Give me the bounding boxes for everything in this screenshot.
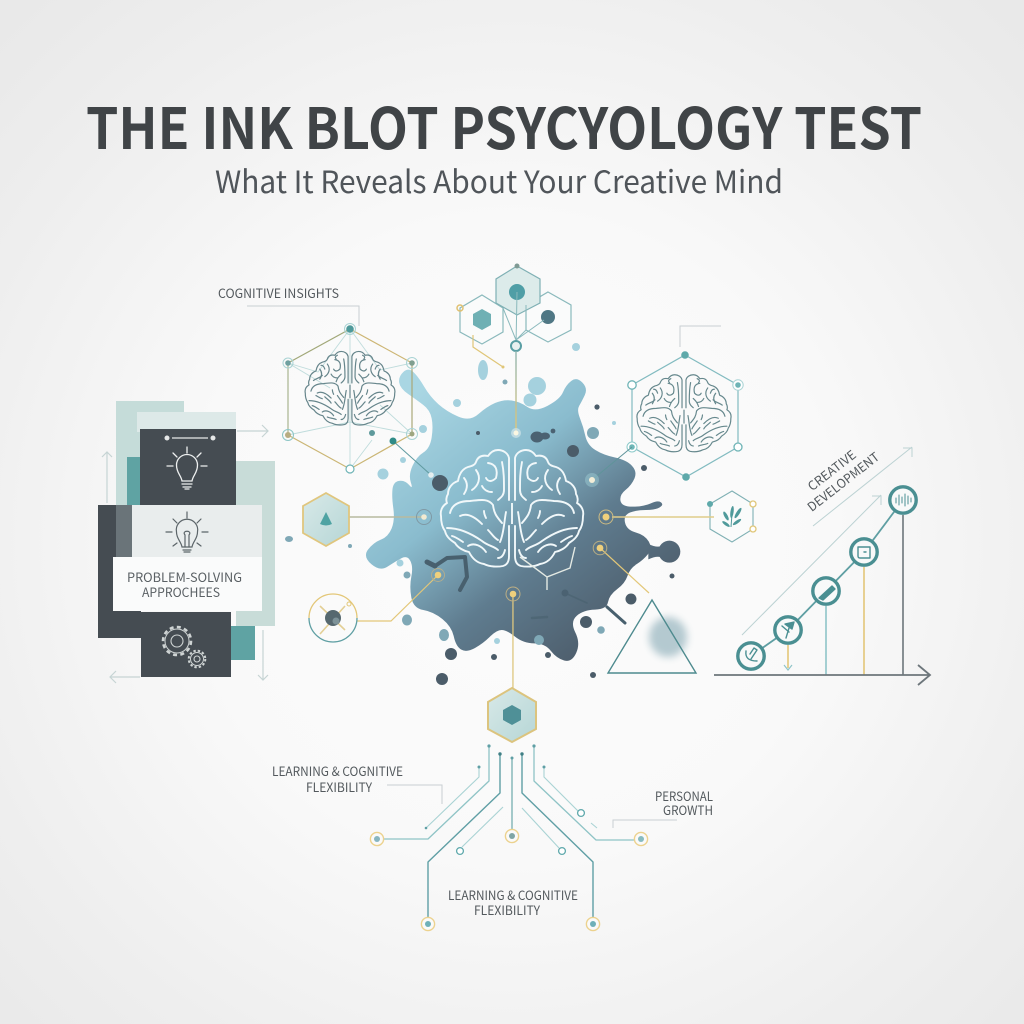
label: learning and cognitive flexibility bottom: FLEXIBILITY	[474, 900, 540, 919]
label: problem-solving approaches: APPROCHEES	[142, 582, 220, 601]
label: learning and cognitive flexibility left	[272, 761, 442, 804]
arrows around panel	[102, 425, 268, 683]
circuit ring nodes	[457, 810, 584, 854]
milestone icons	[746, 494, 911, 661]
triangle with blur	[593, 541, 696, 673]
right hexagon with leaf icon	[599, 491, 756, 542]
label: learning and cognitive flexibility left: LEARNING & COGNITIVE	[272, 761, 403, 780]
label: personal growth: GROWTH	[663, 800, 713, 819]
label: problem-solving approaches: PROBLEM-SOLVING	[127, 567, 242, 586]
hexagon nodes	[627, 351, 743, 481]
icon: light bulb on dark card	[167, 447, 207, 489]
label: personal growth: PERSONAL	[655, 786, 713, 805]
circuit gold nodes	[370, 829, 648, 931]
label: problem-solving approaches	[127, 567, 242, 601]
brain line art	[305, 351, 395, 425]
connector to ink blot	[393, 441, 431, 475]
trend arrows	[742, 447, 912, 635]
bottom hexagon with connector	[488, 587, 536, 742]
icon: leaf sprig	[721, 506, 743, 528]
label: creative development: DEVELOPMENT	[803, 446, 883, 515]
circuit end dots	[425, 744, 546, 829]
subtitle: What It Reveals About Your Creative Mind	[215, 157, 783, 202]
ink blot	[366, 370, 680, 661]
circuit lines	[370, 744, 648, 931]
label: cognitive insights	[218, 283, 359, 326]
icon: gears	[163, 627, 205, 667]
axis	[714, 665, 930, 685]
stem lines	[788, 515, 903, 675]
label: personal growth	[613, 786, 713, 828]
chart: creative development	[714, 434, 930, 685]
label: creative development: CREATIVE	[803, 445, 860, 495]
panel: cognitive insights hexagon with brain	[282, 324, 434, 478]
panel: top hexagon cluster	[457, 264, 571, 438]
dark ink splatters	[427, 429, 625, 623]
brain stem branch	[520, 547, 575, 590]
label: learning and cognitive flexibility bottom	[448, 885, 578, 919]
hexagon nodes	[282, 324, 418, 473]
central brain	[441, 450, 583, 567]
brain line art	[637, 375, 731, 452]
icon: light bulb on light card	[166, 512, 208, 552]
circle node with gold connector	[309, 568, 444, 642]
panel: problem-solving approaches	[98, 401, 275, 683]
label: cognitive insights: COGNITIVE INSIGHTS	[218, 283, 339, 302]
label: learning and cognitive flexibility bottom: LEARNING & COGNITIVE	[448, 885, 578, 904]
panel: right hexagon with brain	[585, 326, 743, 487]
left hexagon node	[303, 493, 432, 546]
icon: slider on top card	[165, 436, 215, 440]
ink droplets	[285, 343, 674, 685]
milestone circles	[738, 487, 916, 669]
label: learning and cognitive flexibility left: FLEXIBILITY	[306, 777, 372, 796]
title: THE INK BLOT PSYCYOLOGY TEST	[86, 84, 922, 166]
trend line	[751, 500, 903, 656]
